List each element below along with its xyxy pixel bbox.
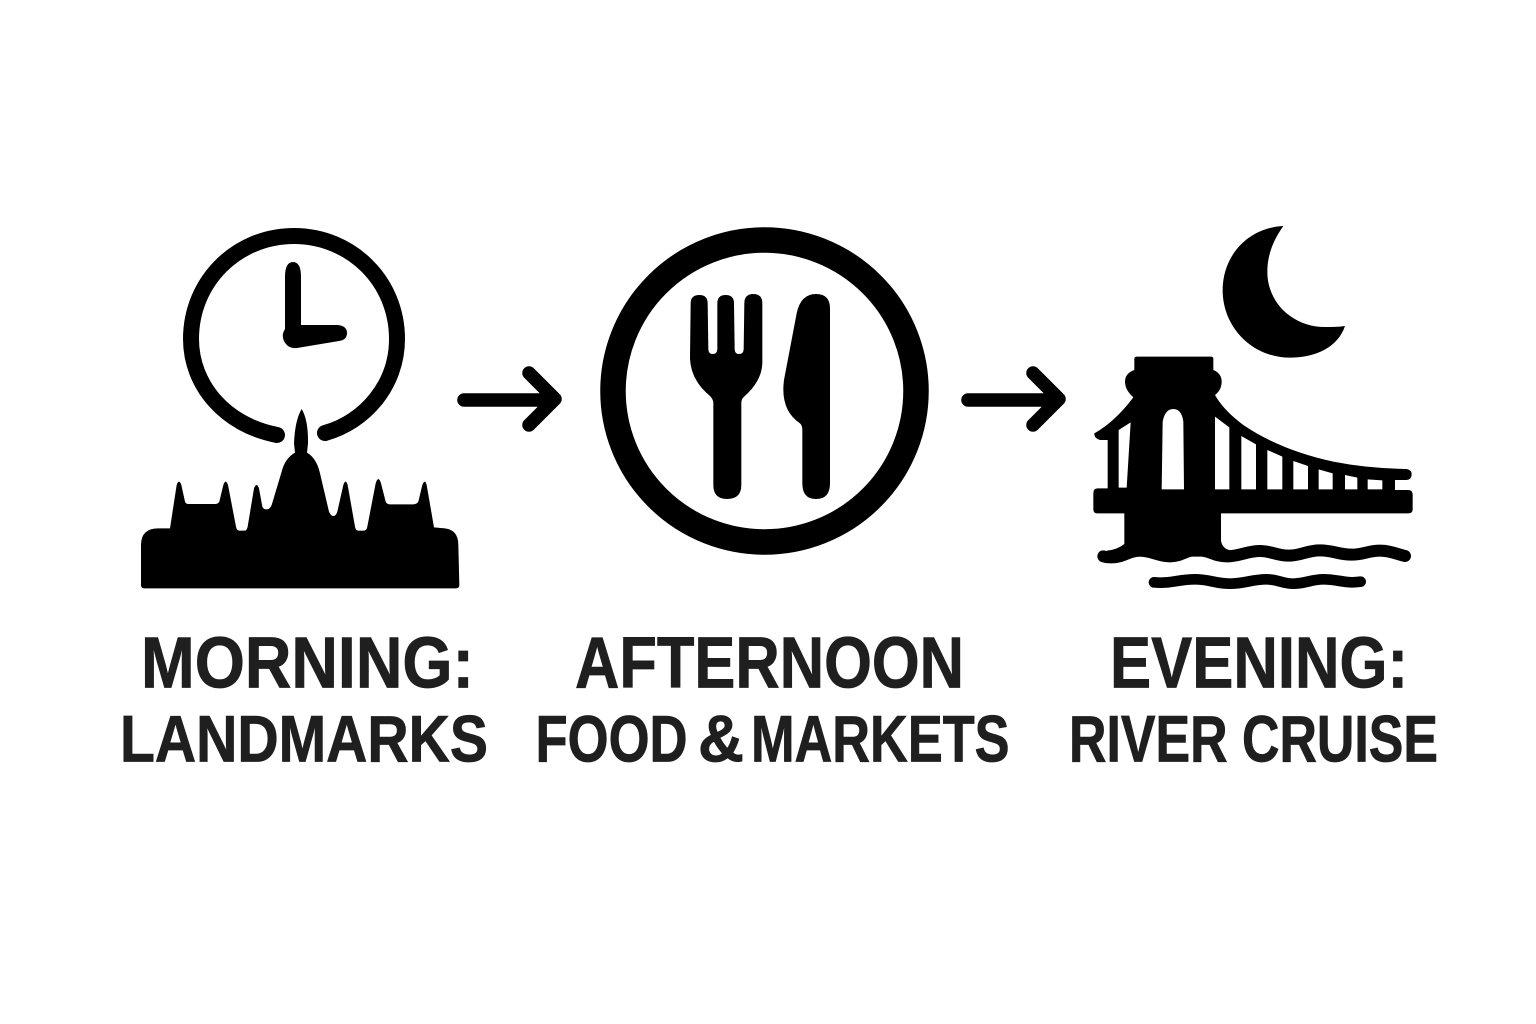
heading: afternoon: AFTERNOON [575,622,964,704]
label: food and markets: MARKETS [751,702,1010,776]
panel: evening [1069,226,1438,776]
icon: clock [191,236,397,435]
icon: fork [690,294,762,499]
label: food and markets: & [698,702,744,776]
icon: landmark skyline [141,409,459,588]
label: food and markets: FOOD [536,702,688,776]
arrow: morning to afternoon [464,373,555,425]
label: river cruise: RIVER CRUISE [1069,702,1438,776]
heading: evening: EVENING: [1110,622,1408,704]
heading: morning: MORNING: [141,622,474,704]
label: landmarks: LANDMARKS [120,702,488,776]
panel: morning [120,236,488,776]
icon: suspension bridge [1093,357,1413,584]
icon: knife [783,294,830,499]
label: food and markets [536,702,1010,776]
icon: plate ring [613,240,916,542]
arrow: afternoon to evening [968,373,1059,425]
icon: crescent moon [1223,226,1345,358]
panel: afternoon [536,240,1010,776]
